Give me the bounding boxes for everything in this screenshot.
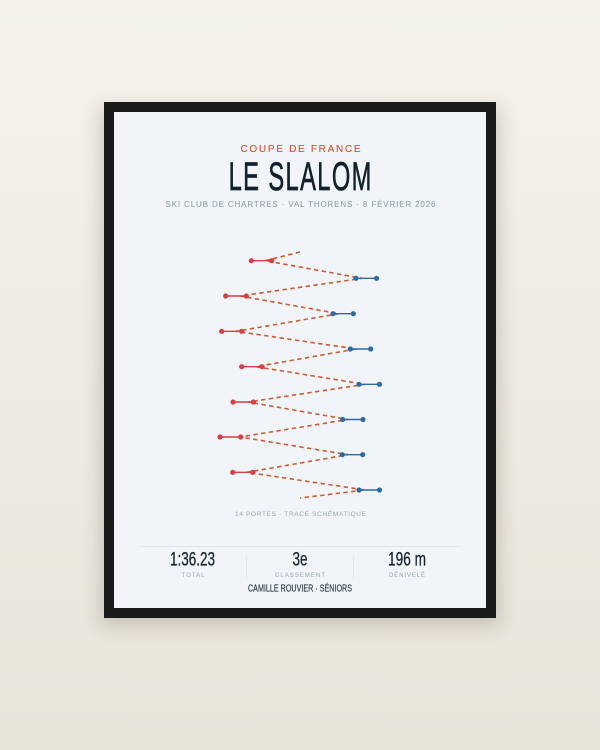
stat: total time [170,550,215,579]
course caption: 14 PORTES · TRACÉ SCHÉMATIQUE [235,509,367,518]
stat: elevation: 196 m [388,550,426,570]
slalom course chart [217,252,382,498]
poster panel [114,112,486,608]
stat: ranking: CLASSEMENT [275,573,325,579]
blue gates [330,276,382,493]
stat: ranking: 3e [292,550,308,570]
stat: elevation: DÉNIVELÉ [389,572,425,579]
stat columns separators [246,556,354,579]
stats divider [139,546,461,548]
stat: total time: TOTAL [182,573,205,579]
eyebrow: competition name: COUPE DE FRANCE [240,144,361,155]
stat: ranking [275,550,325,579]
racing line [236,252,365,498]
stat: elevation [388,550,426,579]
title: LE SLALOM [229,155,371,198]
subtitle: SKI CLUB DE CHARTRES · VAL THORENS · 8 FÉVRIER 2026 [166,200,436,209]
stat: total time: 1:36.23 [170,550,215,570]
red gates [217,258,274,475]
frame [104,102,496,618]
frame shadow [100,108,500,626]
athlete name: CAMILLE ROUVIER · SÉNIORS [248,582,352,594]
